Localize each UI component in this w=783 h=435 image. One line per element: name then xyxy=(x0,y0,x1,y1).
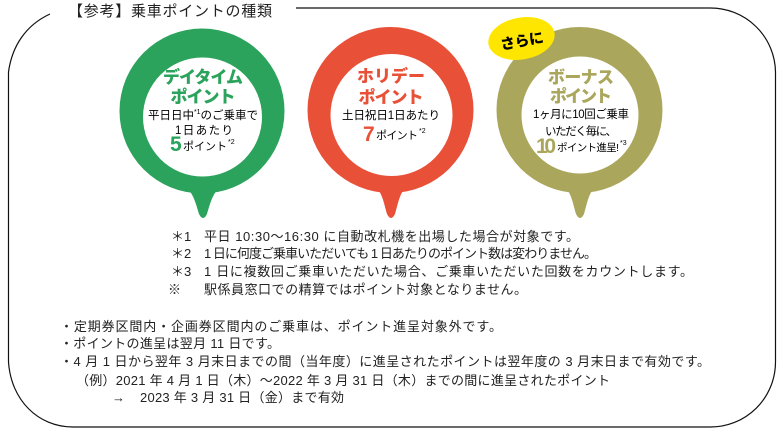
pin: daytime point: デイタイム xyxy=(163,67,243,87)
pin: holiday point: ポイント xyxy=(358,87,424,107)
pin: bonus point: ポイント進呈! xyxy=(557,141,619,154)
footnotes: ＊3 xyxy=(171,264,191,279)
footnotes: 1 日に何度ご乗車いただいても 1 日あたりのポイント数は変わりません。 xyxy=(204,246,597,261)
conditions list: ・ポイントの進呈は翌月 11 日です。 xyxy=(60,336,280,351)
conditions list: （例）2021 年 4 月 1 日（木）～2022 年 3 月 31 日（木）までの間に進呈されたポイント xyxy=(76,373,610,388)
pin: daytime point: 平日日中 xyxy=(148,110,194,122)
footnotes: 平日 10:30～16:30 に自動改札機を出場した場合が対象です。 xyxy=(204,229,579,244)
conditions list: 2023 年 3 月 31 日（金）まで有効 xyxy=(140,390,344,405)
conditions list: ・4 月 1 日から翌年 3 月末日までの間（当年度）に進呈されたポイントは翌年度の 3 月末日まで有効です。 xyxy=(60,354,710,369)
pin: daytime point: *2 xyxy=(228,139,235,146)
pin: bonus point: 10 xyxy=(536,135,556,158)
pin: daytime point: 5 xyxy=(170,133,182,156)
pin: holiday point: ポイント xyxy=(376,129,418,142)
pin: holiday point: 土日祝日1日あたり xyxy=(342,108,440,122)
pin: bonus point: 1ヶ月に10回ご乗車 xyxy=(533,107,629,121)
pin: daytime point: のご乗車で xyxy=(201,108,258,122)
pin: bonus point: *3 xyxy=(620,140,627,147)
footnotes: ＊1 xyxy=(171,229,191,244)
pin: daytime point: *1 xyxy=(194,109,201,116)
pin: holiday point xyxy=(308,27,474,218)
footnotes: 駅係員窓口での精算ではポイント対象となりません。 xyxy=(204,282,527,297)
pin: holiday point: *2 xyxy=(419,128,426,135)
badge: さらに xyxy=(485,12,558,65)
footnotes: 1 日に複数回ご乗車いただいた場合、ご乗車いただいた回数をカウントします。 xyxy=(204,264,693,279)
conditions list: ・定期券区間内・企画券区間内のご乗車は、ポイント進呈対象外です。 xyxy=(60,319,502,334)
pin: holiday point: ホリデー xyxy=(357,66,425,86)
footnotes xyxy=(168,229,693,297)
pin: bonus point: ポイント xyxy=(550,86,612,106)
badge: さらに: さらに xyxy=(499,29,545,54)
footnotes: ※ xyxy=(168,282,181,297)
pin: daytime point: ポイント xyxy=(170,86,236,106)
footnotes: ＊2 xyxy=(171,246,191,261)
pin: holiday point: 7 xyxy=(363,123,375,146)
conditions list: → xyxy=(112,390,125,405)
heading: 【参考】乗車ポイントの種類 xyxy=(68,3,272,20)
pin: daytime point xyxy=(120,28,284,218)
pin: bonus point xyxy=(496,27,662,218)
pin: bonus point: ボーナス xyxy=(548,68,614,87)
conditions list xyxy=(60,319,710,405)
pin: daytime point: 1日あたり xyxy=(175,124,233,137)
pin: daytime point: ポイント xyxy=(183,140,227,153)
pin: bonus point: いただく毎に、 xyxy=(545,125,617,138)
